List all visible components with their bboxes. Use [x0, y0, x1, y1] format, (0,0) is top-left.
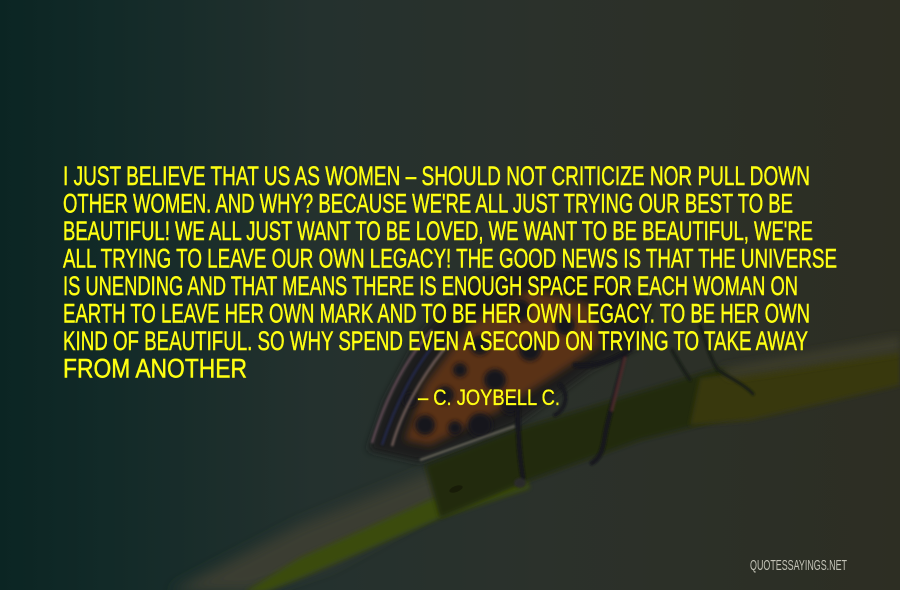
- photo: insect: [368, 262, 753, 488]
- attribution: – C. JOYBELL C.: [418, 385, 560, 410]
- photo: small speck on stem: [448, 484, 464, 494]
- insect legs: [514, 325, 753, 488]
- quote text: FROM ANOTHER: [63, 354, 247, 384]
- quote text: [63, 161, 837, 384]
- insect wing stripes: [372, 330, 515, 460]
- insect body: [368, 262, 650, 462]
- photo: grass stem: [170, 336, 900, 590]
- insect spots: [403, 299, 575, 437]
- insect orange wing: [405, 290, 600, 445]
